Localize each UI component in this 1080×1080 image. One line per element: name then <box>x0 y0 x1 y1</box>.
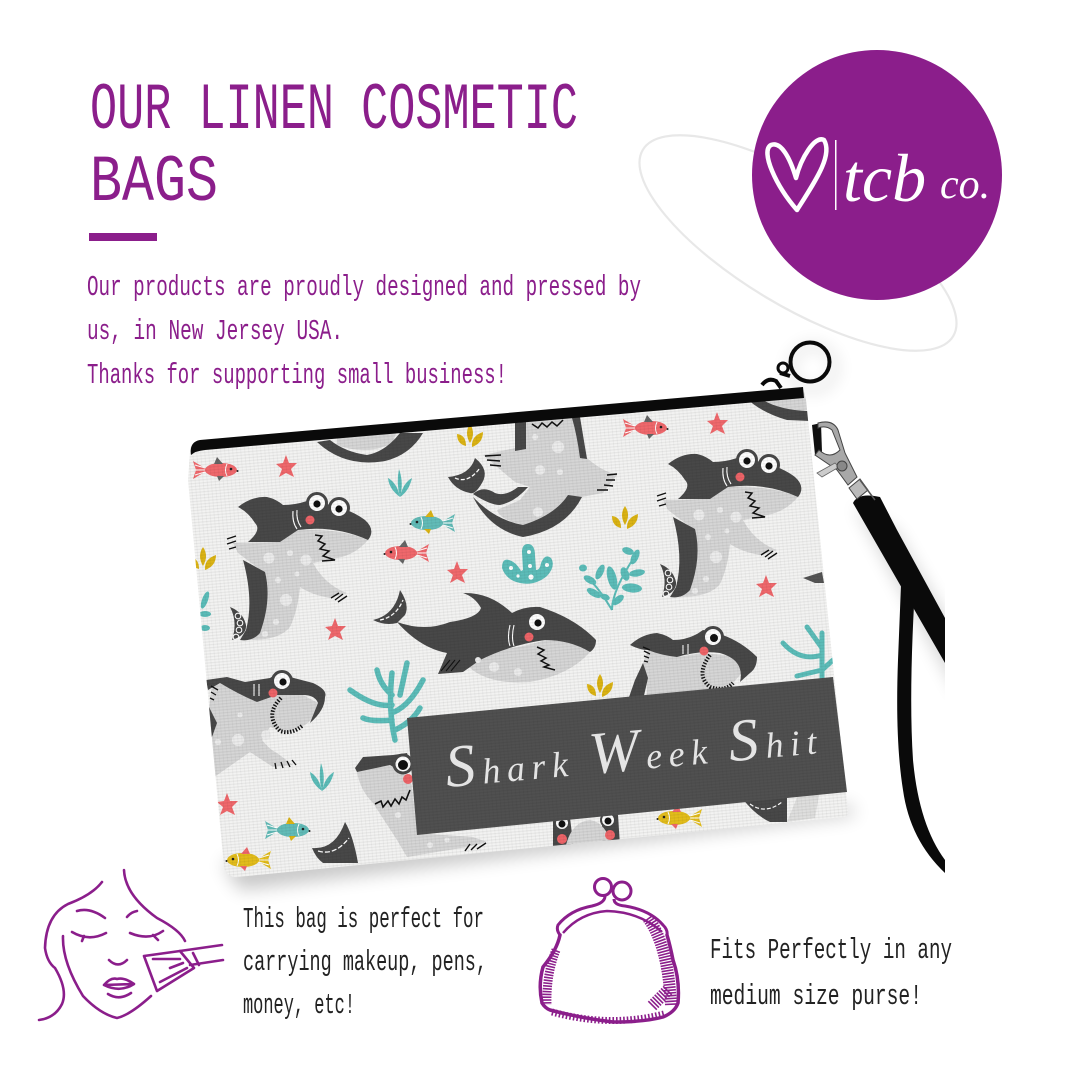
shark: right lower <box>628 628 757 705</box>
shark: right upright <box>657 450 801 597</box>
shark: centre <box>373 590 596 682</box>
lobster clasp <box>812 422 875 500</box>
intro text block: Our products are proudly designed and pressed by <box>87 271 641 304</box>
starfish <box>217 412 777 815</box>
small tail at right edge <box>803 572 824 583</box>
title: BAGS <box>90 145 218 220</box>
intro text block <box>87 271 641 392</box>
coral plants and leaves <box>190 424 833 791</box>
bag fabric <box>188 387 848 877</box>
feature text: purse fit: medium size purse! <box>710 980 922 1013</box>
bag shadow <box>222 805 856 890</box>
logo divider <box>835 140 836 210</box>
icon: face with makeup brush <box>39 870 223 1020</box>
title: OUR LINEN COSMETIC <box>90 73 578 148</box>
icon: coin purse <box>540 878 678 1022</box>
feature text: bag use: This bag is perfect for <box>243 903 484 936</box>
icon: heart <box>767 139 826 210</box>
banner script text: Shark Week Shit <box>442 700 820 800</box>
fabric weave <box>180 380 860 890</box>
key ring <box>762 342 835 390</box>
feature text: purse fit: Fits Perfectly in any <box>710 934 952 967</box>
shark: bottom peek and tail <box>553 795 819 846</box>
shark: top-left crescent <box>317 433 423 462</box>
shark: top centre <box>448 415 617 537</box>
logo wordmark: co. <box>940 162 990 208</box>
shark: left lower <box>205 670 326 778</box>
cosmetic bag <box>180 380 860 890</box>
shark: bottom <box>312 753 487 863</box>
feature text: bag use: money, etc! <box>243 989 355 1022</box>
logo badge <box>752 50 1002 300</box>
wrist strap <box>853 496 945 873</box>
title <box>90 73 578 220</box>
shark: left upright <box>227 494 371 640</box>
fish <box>193 415 702 871</box>
feature text: bag use <box>243 903 487 1022</box>
intro text block: Thanks for supporting small business! <box>87 359 507 392</box>
feature text: purse fit <box>710 934 952 1013</box>
name banner <box>407 677 847 835</box>
zipper <box>191 387 804 455</box>
feature text: bag use: carrying makeup, pens, <box>243 946 487 979</box>
logo wordmark: tcb <box>843 140 926 216</box>
shark: top-right crescent <box>751 392 808 421</box>
title underline bar <box>89 233 157 241</box>
orbit ellipse decoration <box>610 96 986 390</box>
intro text block: us, in New Jersey USA. <box>87 315 343 348</box>
